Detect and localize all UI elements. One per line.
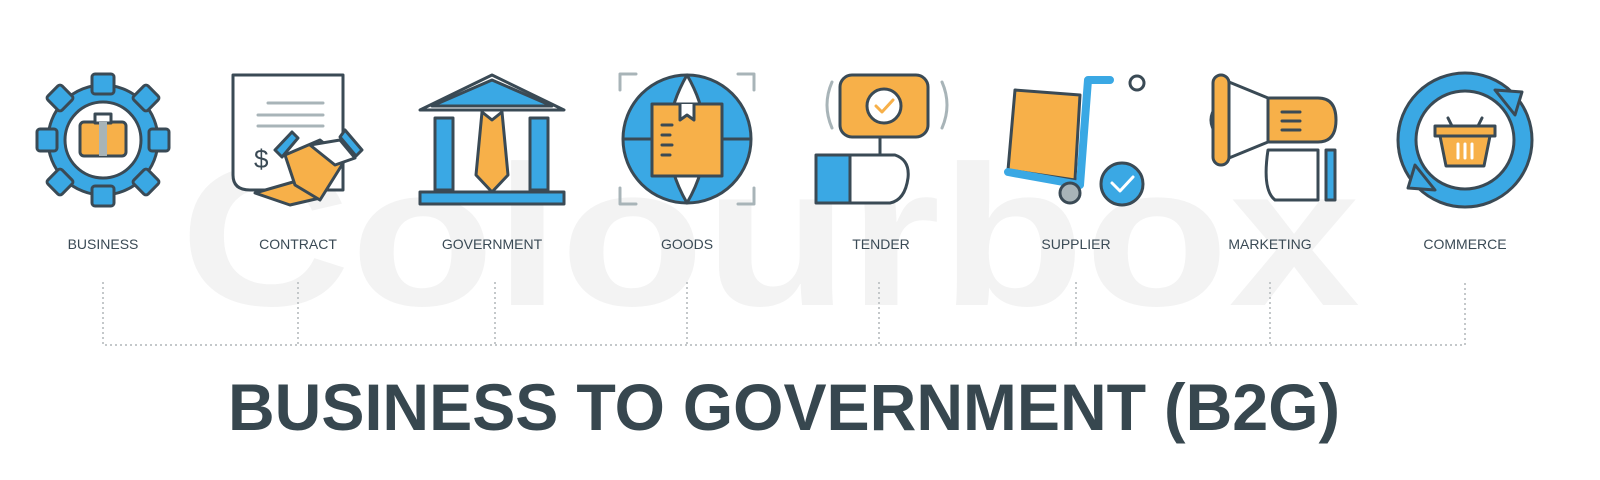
labels: TENDER bbox=[852, 236, 910, 252]
labels: GOVERNMENT bbox=[442, 236, 543, 252]
icon: government bbox=[420, 75, 564, 204]
labels bbox=[68, 236, 1507, 252]
icon: contract bbox=[233, 75, 362, 205]
watermark: Colourbox bbox=[180, 125, 1360, 348]
title: BUSINESS TO GOVERNMENT (B2G) bbox=[228, 370, 1340, 444]
connector lines bbox=[103, 282, 1465, 345]
labels: SUPPLIER bbox=[1041, 236, 1111, 252]
icon: contract: $ bbox=[254, 144, 269, 174]
labels: MARKETING bbox=[1228, 236, 1312, 252]
labels: BUSINESS bbox=[68, 236, 138, 252]
icon: business gear bbox=[37, 74, 169, 206]
icon: supplier bbox=[1008, 76, 1144, 205]
icon: marketing bbox=[1211, 75, 1336, 200]
icon: goods globe bbox=[620, 74, 754, 204]
labels: CONTRACT bbox=[259, 236, 337, 252]
icon: tender bbox=[816, 75, 947, 203]
labels: GOODS bbox=[661, 236, 713, 252]
labels: COMMERCE bbox=[1423, 236, 1507, 252]
icon: commerce bbox=[1398, 73, 1532, 207]
